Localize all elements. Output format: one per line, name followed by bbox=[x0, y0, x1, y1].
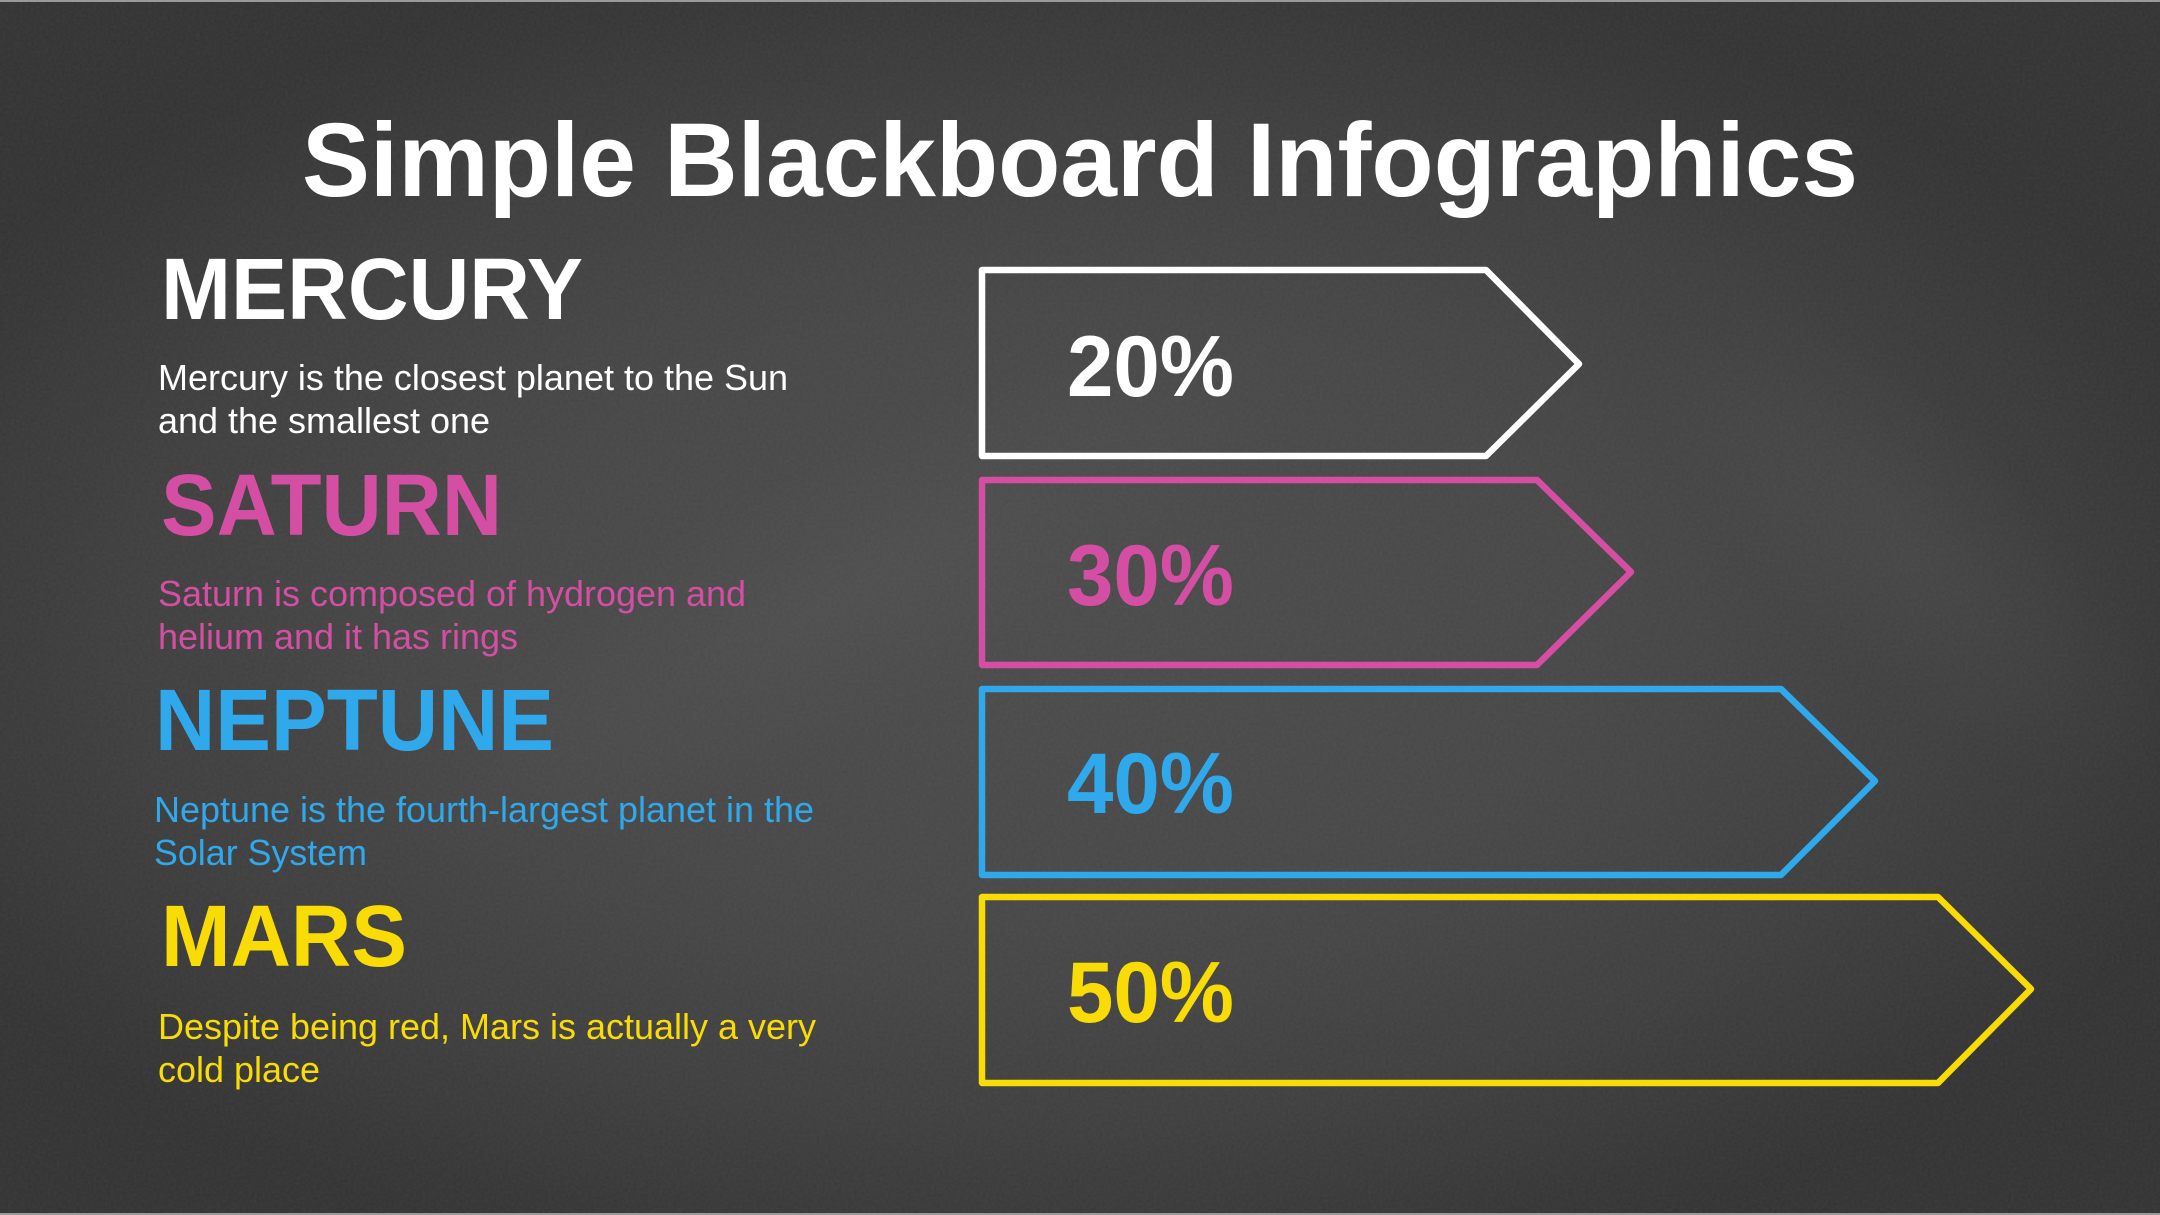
arrow: Saturn 30% bbox=[982, 480, 1631, 665]
text: Mercury description: Mercury is the closest planet to the Sun bbox=[158, 357, 788, 398]
panel: Mars description bbox=[158, 888, 816, 1090]
value: 50%: 50% bbox=[1067, 945, 1234, 1041]
value: 40%: 40% bbox=[1067, 736, 1234, 832]
heading: Neptune: NEPTUNE bbox=[155, 672, 554, 769]
text: Neptune description: Neptune is the fourth-largest planet in the bbox=[154, 789, 814, 830]
arrow: Mars 50% bbox=[982, 897, 2031, 1083]
panel: Saturn description bbox=[158, 457, 746, 657]
text: Mercury description: and the smallest one bbox=[158, 400, 490, 441]
arrow: Mercury 20% bbox=[982, 270, 1579, 456]
heading: Mercury: MERCURY bbox=[161, 241, 583, 338]
text: Mars description: cold place bbox=[158, 1049, 320, 1090]
value: 20%: 20% bbox=[1067, 319, 1234, 415]
text: Saturn description: Saturn is composed of hydrogen and bbox=[158, 573, 746, 614]
title: Simple Blackboard Infographics bbox=[302, 102, 1858, 219]
text: Mars description: Despite being red, Mars is actually a very bbox=[158, 1006, 816, 1047]
arrow: Neptune 40% bbox=[982, 689, 1875, 875]
text: Saturn description: helium and it has rings bbox=[158, 616, 518, 657]
value: 30%: 30% bbox=[1067, 528, 1234, 624]
panel: Mercury description bbox=[158, 241, 788, 441]
heading: Saturn: SATURN bbox=[161, 457, 502, 554]
text: Neptune description: Solar System bbox=[154, 832, 367, 873]
panel: Neptune description bbox=[154, 672, 814, 873]
heading: Mars: MARS bbox=[161, 888, 407, 985]
